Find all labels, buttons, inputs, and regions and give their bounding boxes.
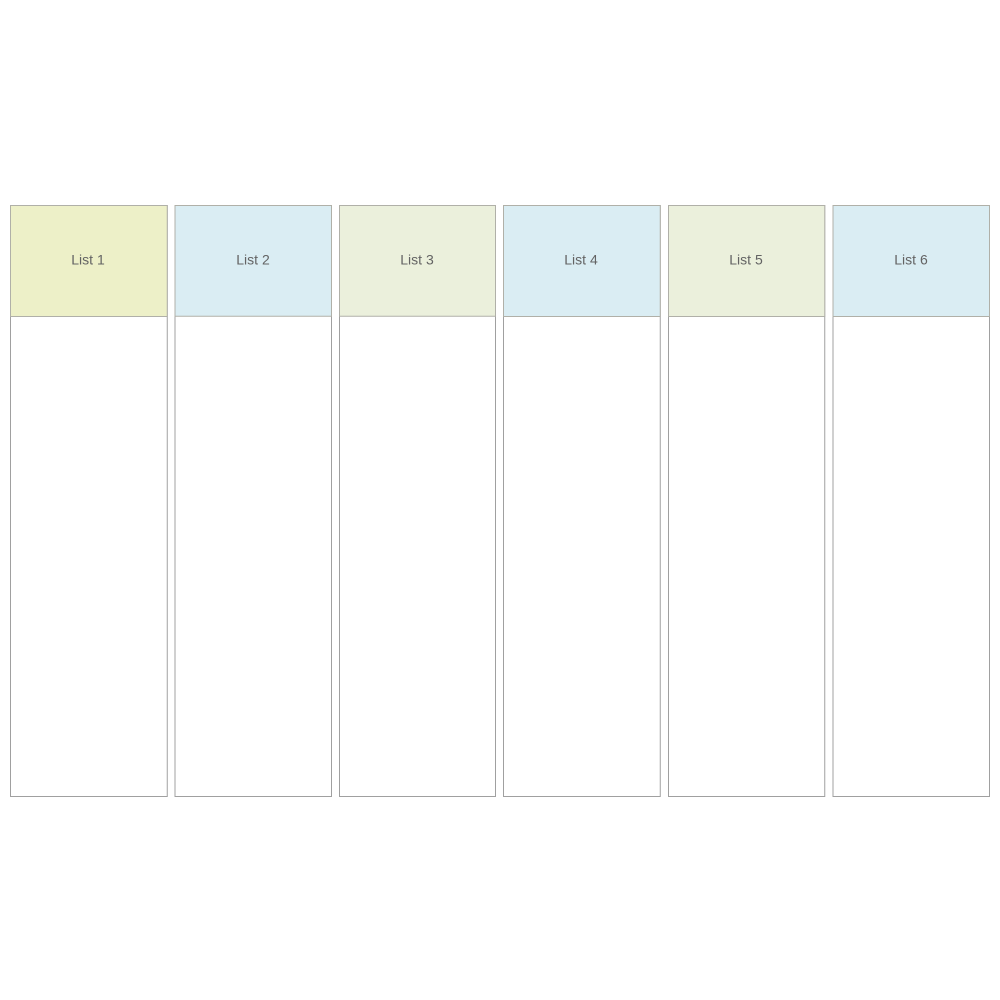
header: List 6: List 6	[894, 252, 928, 268]
column: List 3	[340, 206, 496, 796]
header: List 6	[833, 206, 990, 316]
column: List 2	[175, 206, 332, 796]
header: List 4	[504, 206, 660, 316]
column: List 1	[10, 206, 167, 796]
header: List 1: List 1	[71, 252, 105, 268]
header: List 4: List 4	[564, 252, 598, 268]
header: List 1	[10, 206, 167, 316]
column: List 5	[668, 206, 825, 796]
header: List 5	[668, 206, 825, 316]
header: List 3: List 3	[400, 252, 434, 268]
column: List 4	[504, 206, 660, 796]
header: List 5: List 5	[729, 252, 763, 268]
column: List 6	[833, 206, 990, 796]
header: List 2: List 2	[236, 252, 270, 268]
header: List 2	[175, 206, 332, 316]
header: List 3	[340, 206, 496, 316]
